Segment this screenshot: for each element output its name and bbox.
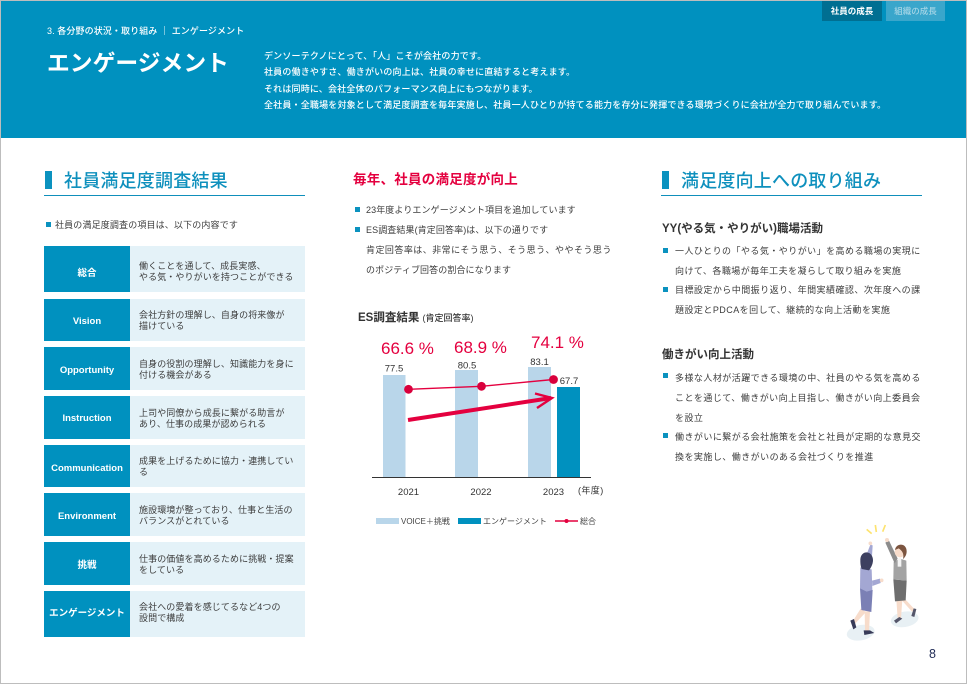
line series: total	[404, 375, 558, 394]
row: 総合	[44, 246, 305, 292]
row: 挑戦: 仕事の価値を高めるために挑戦・提案	[139, 554, 294, 564]
panel: initiatives heading: 満足度向上への取り組み	[681, 171, 881, 191]
heading: satisfaction up: 毎年、社員の満足度が向上	[353, 172, 518, 186]
text block: survey notes: 23年度よりエンゲージメント項目を追加しています	[366, 204, 576, 214]
row: Vision: Vision	[73, 316, 101, 327]
text block: YY activities: 目標設定から中間振り返り、年間実績確認、次年度への課	[675, 285, 921, 295]
text block: motivation activities: ことを通じて、働きがい向上目指し、働きがい向上委員会	[675, 392, 921, 402]
header band	[0, 0, 967, 138]
legend: 総合	[580, 516, 596, 526]
illustration: two women high-fiving	[847, 524, 918, 640]
tab: active: 社員の成長	[831, 6, 873, 16]
row: エンゲージメント: エンゲージメント	[49, 608, 125, 619]
woman left	[850, 542, 884, 635]
row: 挑戦	[44, 542, 305, 585]
text block: YY activities: 一人ひとりの「やる気・やりがい」を高める職場の実現に	[675, 246, 921, 256]
row: Opportunity: 付ける機会がある	[139, 370, 212, 380]
text block: motivation activities: 多様な人材が活躍できる環境の中、社員のやる気を高める	[675, 372, 921, 382]
row: 挑戦: をしている	[139, 565, 184, 575]
heading: survey results: 社員満足度調査結果	[64, 171, 228, 191]
row: Instruction: あり、仕事の成果が認められる	[139, 419, 266, 429]
row: Environment: バランスがとれている	[139, 516, 230, 526]
row: Instruction: Instruction	[62, 413, 112, 424]
breadcrumb: 3. 各分野の状況・取り組み ｜ エンゲージメント	[47, 26, 244, 36]
tab: inactive: 組織の成長	[894, 6, 937, 16]
page number: 8	[929, 647, 936, 661]
intro paragraph: 全社員・全職場を対象として満足度調査を毎年実施し、社員一人ひとりが持てる能力を存分に発揮できる環境づくりに会社が全力で取り組んでいます。	[264, 100, 886, 110]
text block: YY activities: 向けて、各職場が毎年工夫を凝らして取り組みを実施	[675, 266, 901, 276]
row: Instruction	[44, 396, 305, 439]
axis labels: 2023	[543, 487, 564, 498]
value labels: 77.5	[385, 364, 403, 374]
row: エンゲージメント: 設問で構成	[139, 613, 185, 623]
chart title: ES調査結果 (肯定回答率)	[358, 312, 474, 324]
intro paragraph: それは同時に、会社全体のパフォーマンス向上にもつながります。	[264, 84, 538, 94]
text block: YY activities: 題設定とPDCAを回して、継続的な向上活動を実施	[675, 305, 890, 315]
row: 総合: 働くことを通して、成長実感、	[139, 261, 266, 271]
row: 総合: 総合	[77, 268, 96, 279]
text block: motivation activities: 働きがいに繋がる会社施策を会社と社員が定期的な意見交	[675, 432, 921, 442]
row: Environment: Environment	[58, 511, 116, 522]
value labels: 80.5	[458, 360, 476, 372]
percent labels: 68.9 %	[454, 338, 507, 357]
woman right	[885, 538, 916, 623]
row: エンゲージメント: 会社への愛着を感じてるなど4つの	[139, 602, 281, 612]
panel: survey results	[44, 171, 305, 196]
legend: エンゲージメント	[483, 516, 547, 526]
text block: survey notes	[355, 204, 612, 274]
axis labels: 2022	[470, 487, 492, 498]
text block: YY activities	[662, 222, 921, 315]
row: Environment: 施設環境が整っており、仕事と生活の	[139, 505, 293, 515]
text block: survey notes: のポジティブ回答の割合になります	[366, 264, 511, 274]
intro paragraph: デンソーテクノにとって、「人」こそが会社の力です。	[264, 50, 486, 60]
row: Opportunity: 自身の役割の理解し、知識能力を身に	[139, 359, 294, 369]
row: Vision	[44, 299, 305, 341]
text block: YY activities: YY(やる気・やりがい)職場活動	[662, 222, 823, 234]
text block: motivation activities: を設立	[675, 412, 703, 422]
legend	[376, 516, 596, 526]
row: Communication: Communication	[51, 462, 123, 474]
value labels	[385, 357, 578, 387]
axis labels: (年度)	[578, 484, 604, 496]
text block: motivation activities	[662, 348, 921, 462]
row: 総合: やる気・やりがいを持つことができる	[139, 272, 294, 282]
row: Environment	[44, 493, 305, 536]
intro paragraph	[264, 50, 886, 110]
text block: motivation activities: 換を実施し、働きがいのある会社づくりを推進	[675, 452, 874, 462]
row: 挑戦: 挑戦	[77, 560, 96, 571]
percent labels: 74.1 %	[531, 333, 584, 352]
row: Instruction: 上司や同僚から成長に繋がる助言が	[139, 408, 285, 418]
value labels: 83.1	[530, 357, 549, 368]
tab: active	[822, 0, 882, 21]
value labels: 67.7	[560, 376, 578, 387]
row: Opportunity: Opportunity	[60, 365, 114, 376]
row: Communication: る	[139, 467, 148, 477]
arrow: upward trend	[408, 394, 552, 420]
intro bullet: 社員の満足度調査の項目は、以下の内容です	[55, 220, 238, 230]
text block: survey notes: ES調査結果(肯定回答率)は、以下の通りです	[366, 224, 548, 234]
row: Opportunity	[44, 347, 305, 390]
sparks	[867, 525, 885, 534]
title: エンゲージメント	[47, 50, 229, 76]
axis labels	[398, 484, 604, 498]
axis labels: 2021	[398, 487, 419, 498]
tab: inactive	[886, 0, 945, 21]
percent labels	[381, 333, 584, 358]
panel: initiatives heading	[661, 171, 922, 196]
shadows	[846, 609, 920, 643]
row: Vision: 会社方針の理解し、自身の将来像が	[139, 310, 285, 320]
row: Communication: 成果を上げるために協力・連携してい	[139, 456, 293, 466]
intro paragraph: 社員の働きやすさ、働きがいの向上は、社員の幸せに直結すると考えます。	[264, 66, 575, 76]
bars	[372, 367, 591, 478]
row: Communication	[44, 445, 305, 487]
row: エンゲージメント	[44, 591, 305, 637]
heading: survey results	[44, 171, 305, 196]
percent labels: 66.6 %	[381, 339, 434, 358]
row: Vision: 描けている	[139, 321, 185, 331]
text block: motivation activities: 働きがい向上活動	[662, 348, 754, 360]
legend: VOICE＋挑戦	[401, 516, 450, 526]
text block: survey notes: 肯定回答率は、非常にそう思う、そう思う、ややそう思う	[366, 244, 612, 254]
